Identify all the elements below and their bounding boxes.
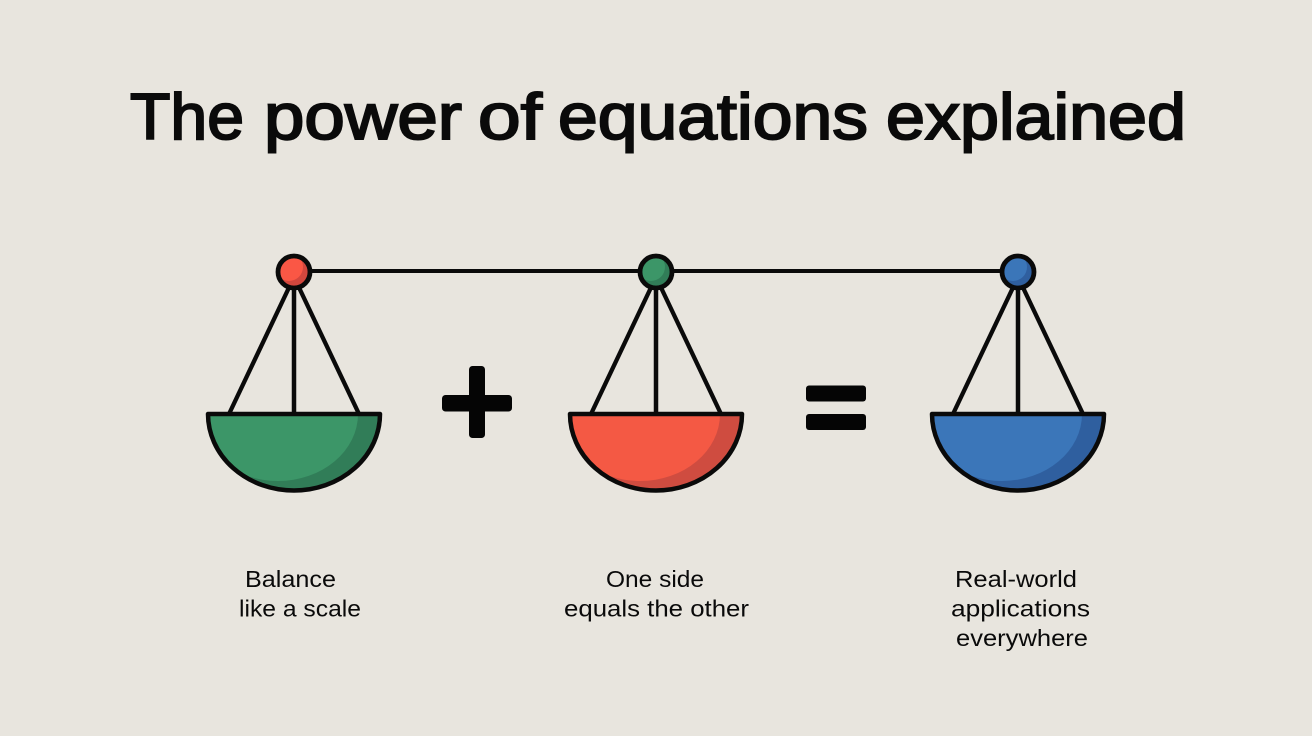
label: real-world applications everywhere: Real-world <box>955 566 1077 592</box>
label: real-world applications everywhere: everywhere <box>956 625 1088 651</box>
title: of <box>478 80 543 153</box>
label: balance like a scale: Balance <box>245 566 336 592</box>
title <box>130 80 1186 153</box>
label: one side equals the other <box>564 566 749 622</box>
label: one side equals the other: One side <box>606 566 704 592</box>
label: balance like a scale: like a scale <box>239 596 361 622</box>
connecting beam <box>294 269 1018 273</box>
title: equations <box>558 80 868 153</box>
scale: green balance <box>198 253 380 490</box>
scale: red balance <box>560 253 742 490</box>
label: balance like a scale <box>239 566 361 622</box>
label: real-world applications everywhere <box>951 566 1090 651</box>
label: real-world applications everywhere: applications <box>951 596 1090 622</box>
equals sign <box>806 386 866 430</box>
title: power <box>264 80 462 153</box>
title: explained <box>886 80 1186 153</box>
title: The <box>130 80 244 153</box>
plus sign <box>442 366 512 438</box>
label: one side equals the other: equals the other <box>564 596 749 622</box>
scale: blue balance <box>922 253 1104 490</box>
